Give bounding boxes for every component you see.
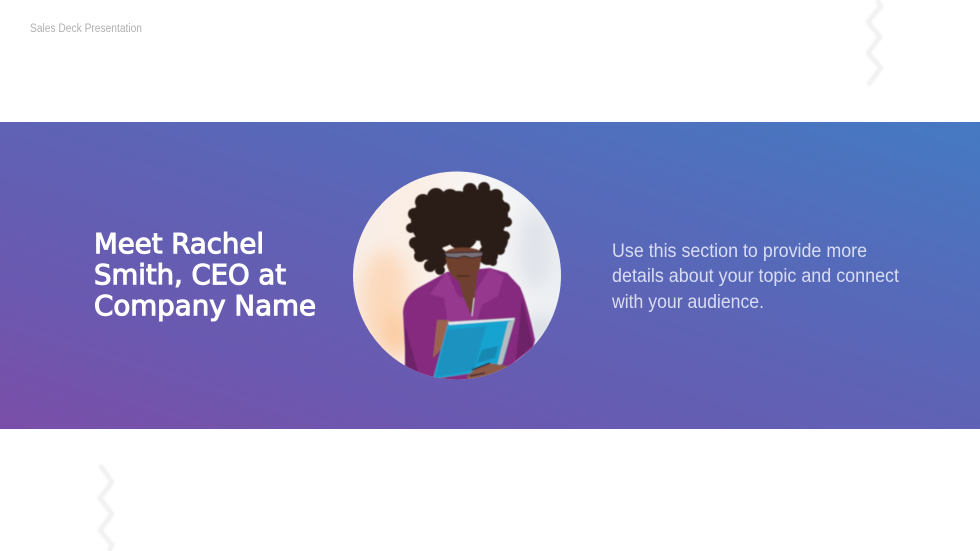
face: [445, 248, 482, 282]
photo wall background: [353, 171, 561, 380]
tablet: [433, 318, 515, 379]
shirt: [403, 268, 535, 382]
gradient band: [0, 122, 980, 429]
neck and chest: [458, 273, 478, 315]
decorative zigzag: bottom left: [100, 465, 112, 551]
deck label: Sales Deck Presentation: [30, 23, 142, 35]
body text: with your audience.: [611, 292, 764, 313]
heading: Smith, CEO at: [94, 258, 286, 291]
decorative zigzag: top right: [868, 0, 881, 85]
necklace: [472, 298, 474, 316]
writing hand: [433, 320, 450, 358]
body text: [611, 241, 900, 313]
body text: Use this section to provide more: [612, 241, 867, 262]
heading: [94, 227, 316, 322]
glasses: [444, 252, 483, 258]
circular portrait photo: [353, 171, 561, 382]
woman figure: [403, 182, 535, 382]
heading: Company Name: [94, 289, 316, 322]
body text: details about your topic and connect: [612, 266, 900, 287]
holding hand: [467, 364, 508, 381]
tablet keyboard: [436, 326, 486, 377]
hair: [406, 182, 512, 275]
heading: Meet Rachel: [94, 227, 264, 260]
